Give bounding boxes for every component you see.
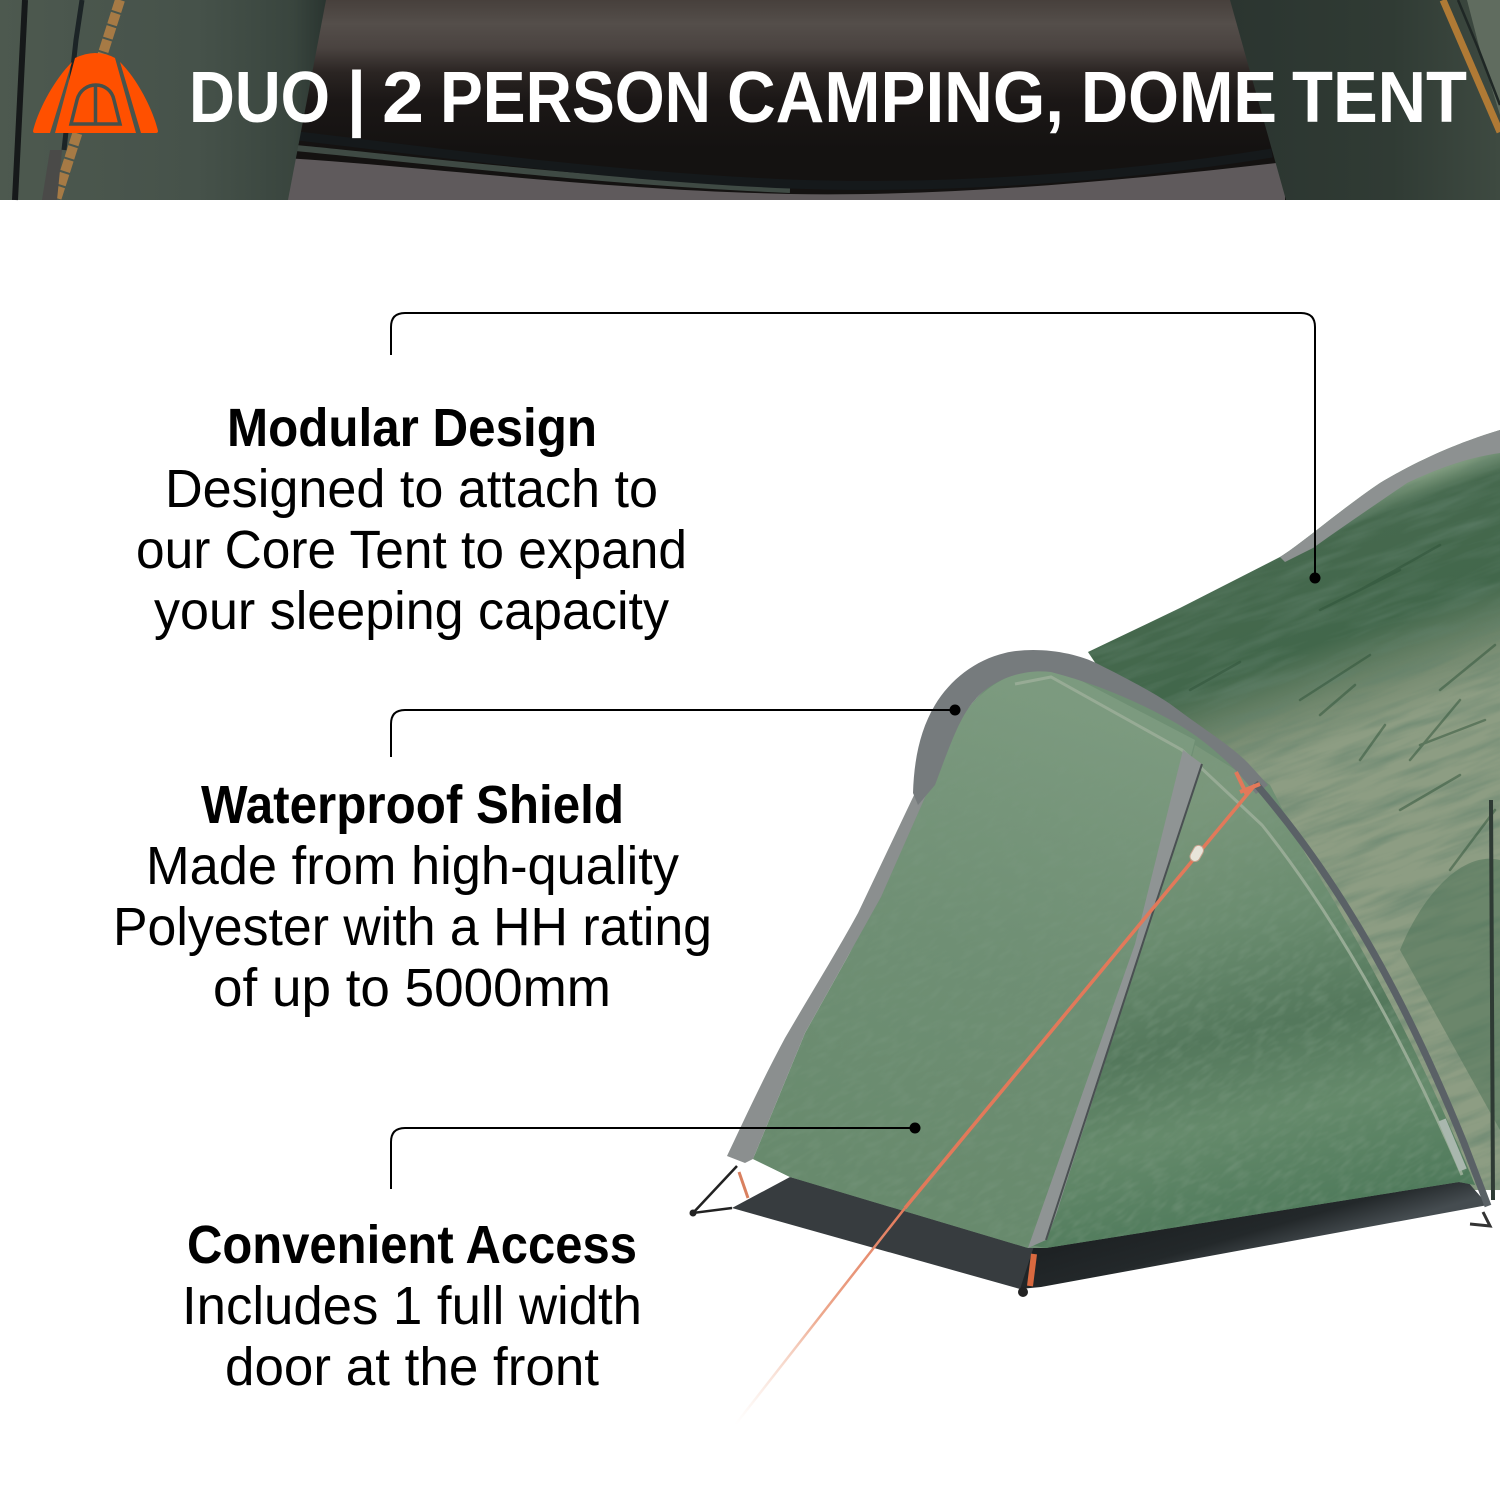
text block: waterproof shield: Polyester with a HH rating <box>113 897 712 957</box>
text block: waterproof shield <box>113 775 712 1018</box>
corner pegs <box>690 1120 1490 1297</box>
text block: convenient access <box>182 1215 642 1397</box>
title: DOME <box>1081 58 1277 138</box>
rear grey trim <box>1280 430 1500 562</box>
text block: modular design: your sleeping capacity <box>154 581 669 641</box>
tent side panel <box>794 536 1500 1457</box>
text block: modular design: Designed to attach to <box>165 459 658 519</box>
grey hood arc <box>913 650 1268 805</box>
banner photo background <box>0 0 1500 200</box>
text block: convenient access: Convenient Access <box>187 1215 637 1275</box>
text block: modular design: our Core Tent to expand <box>136 520 687 580</box>
tent photo <box>690 430 1500 1410</box>
title <box>189 58 1467 138</box>
text block: convenient access: door at the front <box>225 1337 599 1397</box>
callout line: modular design <box>391 313 1320 584</box>
tent pole <box>1255 783 1488 1206</box>
title: | <box>347 58 366 138</box>
tent base fill <box>753 660 1475 1248</box>
icon: tent logo <box>33 53 158 133</box>
callout line: convenient access <box>391 1122 920 1189</box>
grey trim left edge <box>727 725 957 1163</box>
grey door strip <box>1028 750 1202 1248</box>
text block: modular design: Modular Design <box>227 398 597 458</box>
ground sheet <box>732 1172 1488 1289</box>
title: DUO <box>189 58 330 138</box>
callout line: waterproof shield <box>391 704 960 757</box>
title: PERSON <box>440 58 711 138</box>
text block: waterproof shield: Waterproof Shield <box>201 775 624 835</box>
text block: modular design <box>136 398 687 641</box>
header banner <box>0 0 1500 200</box>
seam line <box>1015 677 1462 1175</box>
text block: waterproof shield: Made from high-quality <box>146 836 679 896</box>
guy line <box>735 772 1260 1425</box>
title: 2 <box>382 58 424 138</box>
tent main body <box>1088 430 1500 1200</box>
text block: convenient access: Includes 1 full width <box>182 1276 642 1336</box>
tent front door <box>501 474 1447 1439</box>
title: CAMPING, <box>727 58 1064 138</box>
title: TENT <box>1292 58 1467 138</box>
text block: waterproof shield: of up to 5000mm <box>213 958 611 1018</box>
